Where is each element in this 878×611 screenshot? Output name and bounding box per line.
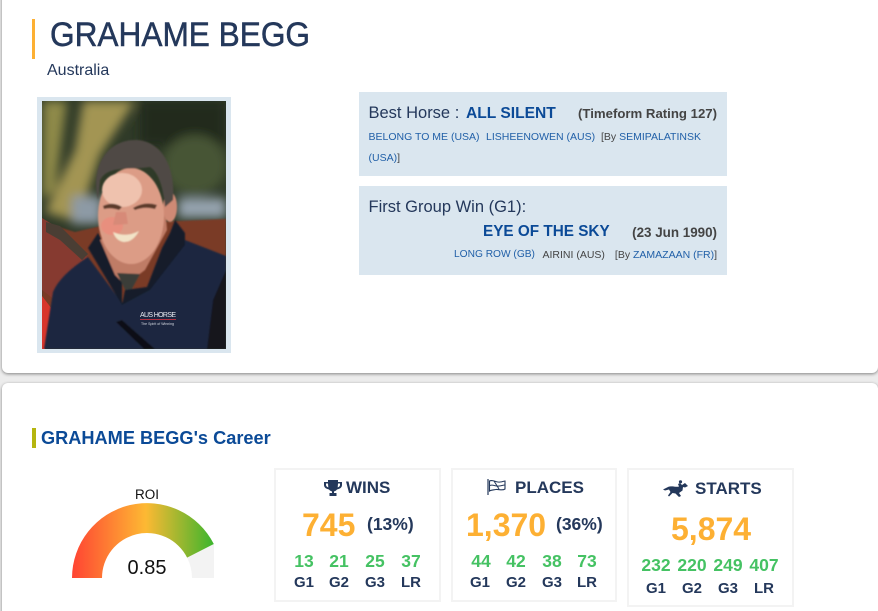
card: starts: 249	[713, 555, 743, 575]
first group win label: First Group Win (G1):	[368, 198, 526, 216]
card: starts: G2	[682, 580, 702, 597]
pedigree links: LONG ROW (GB)	[454, 249, 535, 260]
card: wins: 37	[401, 551, 421, 571]
places percent: (36%)	[556, 514, 603, 534]
card: wins: LR	[401, 574, 421, 591]
info box: first group win	[359, 186, 727, 275]
info box: best horse: [By SEMIPALATINSK	[601, 131, 701, 143]
ROI gauge: 0.85	[128, 557, 166, 579]
info box: best horse: (USA)]	[368, 152, 400, 164]
horse	[42, 219, 226, 320]
card: places: G1	[470, 574, 490, 591]
card: places: 73	[577, 551, 597, 571]
card: places: G3	[542, 574, 562, 591]
wins breakdown: 13	[294, 551, 314, 571]
jacket logo	[140, 312, 176, 326]
card: starts: LR	[754, 580, 774, 597]
card: places	[451, 468, 617, 602]
starts label: STARTS	[695, 479, 762, 498]
career heading accent bar	[32, 428, 36, 448]
card: wins	[274, 468, 441, 602]
panel: profile	[2, 0, 878, 373]
card: wins: 21	[329, 551, 349, 571]
ROI gauge: ROI	[135, 487, 159, 502]
icon: chequered flag	[487, 479, 506, 495]
country: Australia	[47, 62, 109, 79]
win date: (23 Jun 1990)	[632, 225, 717, 240]
card: starts: 220	[677, 555, 707, 575]
places breakdown: 44	[471, 551, 491, 571]
ROI gauge	[72, 487, 214, 579]
wins label: WINS	[346, 478, 390, 497]
photo of trainer	[37, 97, 231, 353]
card: starts: G3	[718, 580, 738, 597]
career heading: GRAHAME BEGG's Career	[41, 428, 271, 448]
info box: first group win: [By ZAMAZAAN (FR)]	[615, 249, 717, 261]
places total: 1,370	[466, 507, 546, 543]
starts total: 5,874	[671, 511, 751, 547]
card: starts	[627, 468, 794, 607]
pedigree links: BELONG TO ME (USA)	[368, 131, 480, 143]
winning horse name: EYE OF THE SKY	[483, 223, 610, 240]
wins total: 745	[302, 507, 355, 543]
card: wins: G3	[365, 574, 385, 591]
card: starts: 407	[749, 555, 779, 575]
info box: best horse: LISHEENOWEN (AUS)	[486, 131, 595, 143]
card: wins: G2	[329, 574, 349, 591]
card: places: 42	[506, 551, 526, 571]
starts breakdown: 232	[641, 555, 671, 575]
card: places: LR	[577, 574, 597, 591]
jacket logo: AUS HORSE	[140, 312, 176, 319]
card: wins: G1	[294, 574, 314, 591]
card: places: 38	[542, 551, 562, 571]
icon: trophy	[324, 480, 342, 496]
places label: PLACES	[515, 478, 584, 497]
wins percent: (13%)	[367, 514, 414, 534]
info box: first group win: AIRINI (AUS)	[542, 249, 605, 261]
title accent bar	[32, 19, 35, 59]
timeform rating: (Timeform Rating 127)	[578, 106, 717, 121]
best horse name: ALL SILENT	[466, 105, 556, 122]
panel: career	[2, 383, 878, 611]
jacket logo: The Spirit of Winning	[141, 322, 174, 326]
title: GRAHAME BEGG	[50, 16, 310, 54]
card: starts: G1	[646, 580, 666, 597]
best horse label: Best Horse :	[368, 104, 459, 122]
card: places: G2	[506, 574, 526, 591]
icon: racehorse	[663, 480, 688, 497]
info box: best horse	[359, 92, 727, 176]
card: wins: 25	[365, 551, 385, 571]
